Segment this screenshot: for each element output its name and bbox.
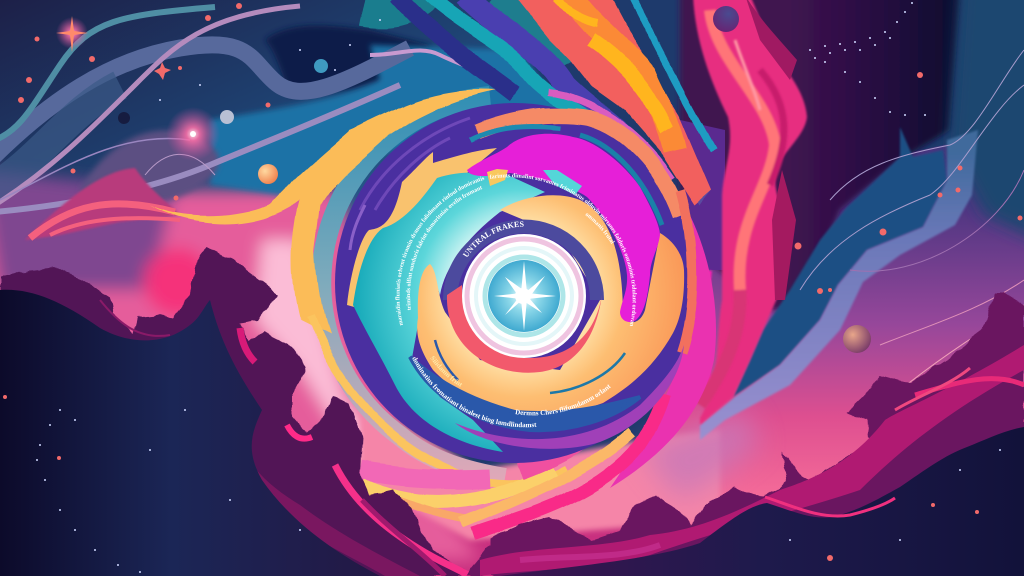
stream: lower right magenta wash (610, 200, 716, 488)
spiral: outer purple ring (335, 103, 695, 463)
spiral: blue accent strokes (435, 340, 625, 393)
spiral: orange swirl (417, 195, 684, 415)
nebula: river highlights (700, 10, 784, 405)
curved text: lower lines: Dermns Chers flifumdamm orlant (515, 384, 611, 416)
mountains: right ridge pink streaks (520, 368, 1024, 560)
nebula: pink river (693, 0, 807, 425)
stream: yellow ribbon bottom (362, 385, 664, 534)
nebula: teal blue band upper left (210, 45, 560, 195)
glowing star: left (166, 107, 220, 161)
curved text: teal band lines: maraidin fluniatis orlvent tiramin dranus falidimant rinfoul domirantis (395, 176, 484, 326)
stream: outer yellow rim left (310, 315, 567, 483)
nebula: lower centre pink sky (360, 400, 720, 540)
nebula: right sky lavender band (700, 130, 978, 440)
spiral: yellow inner rim left (347, 148, 497, 310)
nebula: coral ribbons left (30, 204, 180, 238)
curved text: upper right lines: farinuts dimalint sorvantes friminatus olduvin mirtanes falduris ontaminis tridulant orduvan (490, 173, 637, 326)
curved text: lower lines: dominatius fromatiant binalest bing lamdlindamst (412, 357, 536, 428)
icon: central star (494, 261, 556, 331)
planets and moons (118, 6, 871, 353)
spiral: teal swirl (353, 172, 545, 452)
stream: orange yellow river (150, 89, 495, 335)
spiral: magenta swirl (467, 134, 660, 322)
mountains: left ridge (0, 247, 475, 576)
curved text: lower lines (412, 356, 611, 428)
spiral: lower blue band (410, 357, 640, 430)
inner ring: coral swirl (447, 285, 602, 373)
spiral: upper right coral and pink arcs (470, 93, 691, 355)
glowing star: upper left burst (56, 16, 88, 52)
spiral: yellow and teal tips over magenta (487, 169, 582, 195)
curved text: lower lines: Siiidamn frint (430, 356, 462, 387)
nebula: pink coral flames left (25, 168, 180, 240)
stream: top swirl stripes (362, 0, 714, 205)
curved text: teal band lines: triminds olfint sunduris falrint domaritnias ovelin frumant (406, 186, 482, 310)
curved text: upper right lines: ommanis frutal (586, 213, 615, 244)
curved text: inner ring label: UNTRAL FRAKES (462, 221, 524, 257)
spiral: teal rim on magenta (580, 135, 662, 225)
nebula: dark patch upper left (265, 26, 430, 95)
mountains: left ridge magenta highlights (100, 300, 470, 576)
inner ring: white and pink rings (462, 234, 586, 358)
nebula: lower left pink sky (0, 170, 480, 560)
mountains: right ridge (465, 293, 1024, 576)
nebula: lilac haze lower right of spiral (640, 410, 760, 500)
inner ring: dark blue arc (450, 226, 597, 300)
core: blue circle (488, 260, 560, 332)
nebula: fine trail lines right (800, 50, 1024, 390)
spiral: outer speckled halo (321, 96, 505, 478)
spiral: lower magenta purple band (455, 345, 684, 449)
spiral: purple streaks upper left (350, 118, 470, 250)
nebula bands: upper left (0, 6, 490, 212)
nebula: right sky blue wedge (733, 127, 947, 397)
